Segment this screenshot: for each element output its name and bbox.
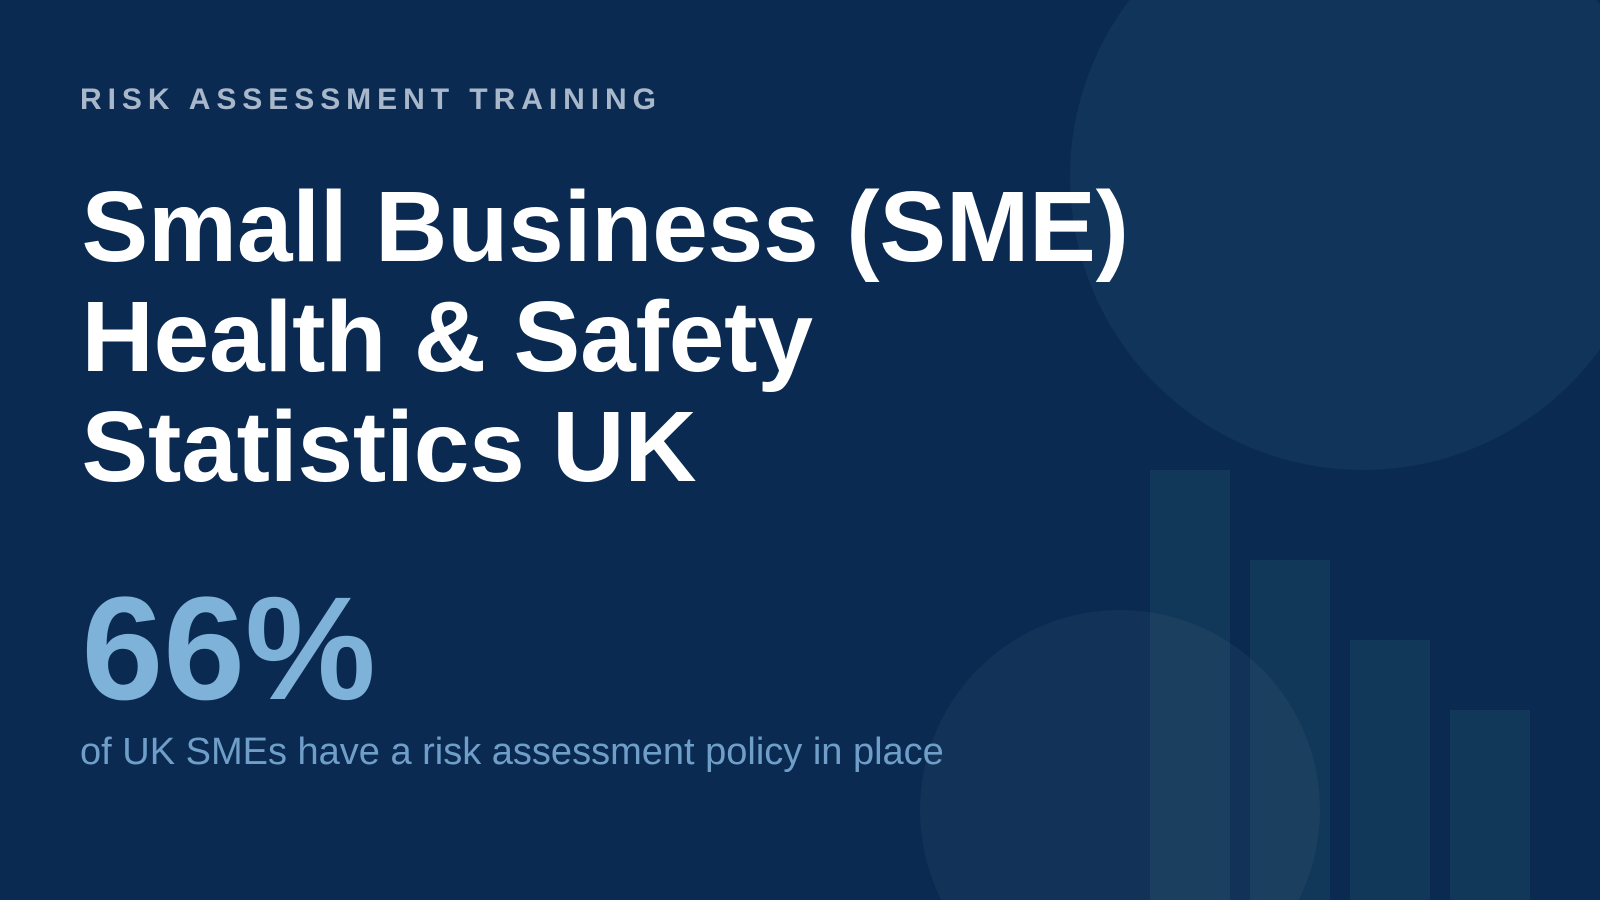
title: Small Business (SME)	[82, 171, 1129, 283]
circle bottom	[920, 610, 1320, 900]
statistic: 66%: 66%	[82, 567, 376, 731]
statistic caption: of UK SMEs have a risk assessment policy in place	[80, 731, 944, 773]
title	[82, 171, 1129, 503]
bar chart decoration	[1150, 470, 1530, 900]
title: Statistics UK	[82, 391, 696, 503]
title: Health & Safety	[82, 281, 813, 393]
eyebrow label: RISK ASSESSMENT TRAINING	[80, 83, 662, 116]
large circle top right	[1070, 0, 1600, 470]
